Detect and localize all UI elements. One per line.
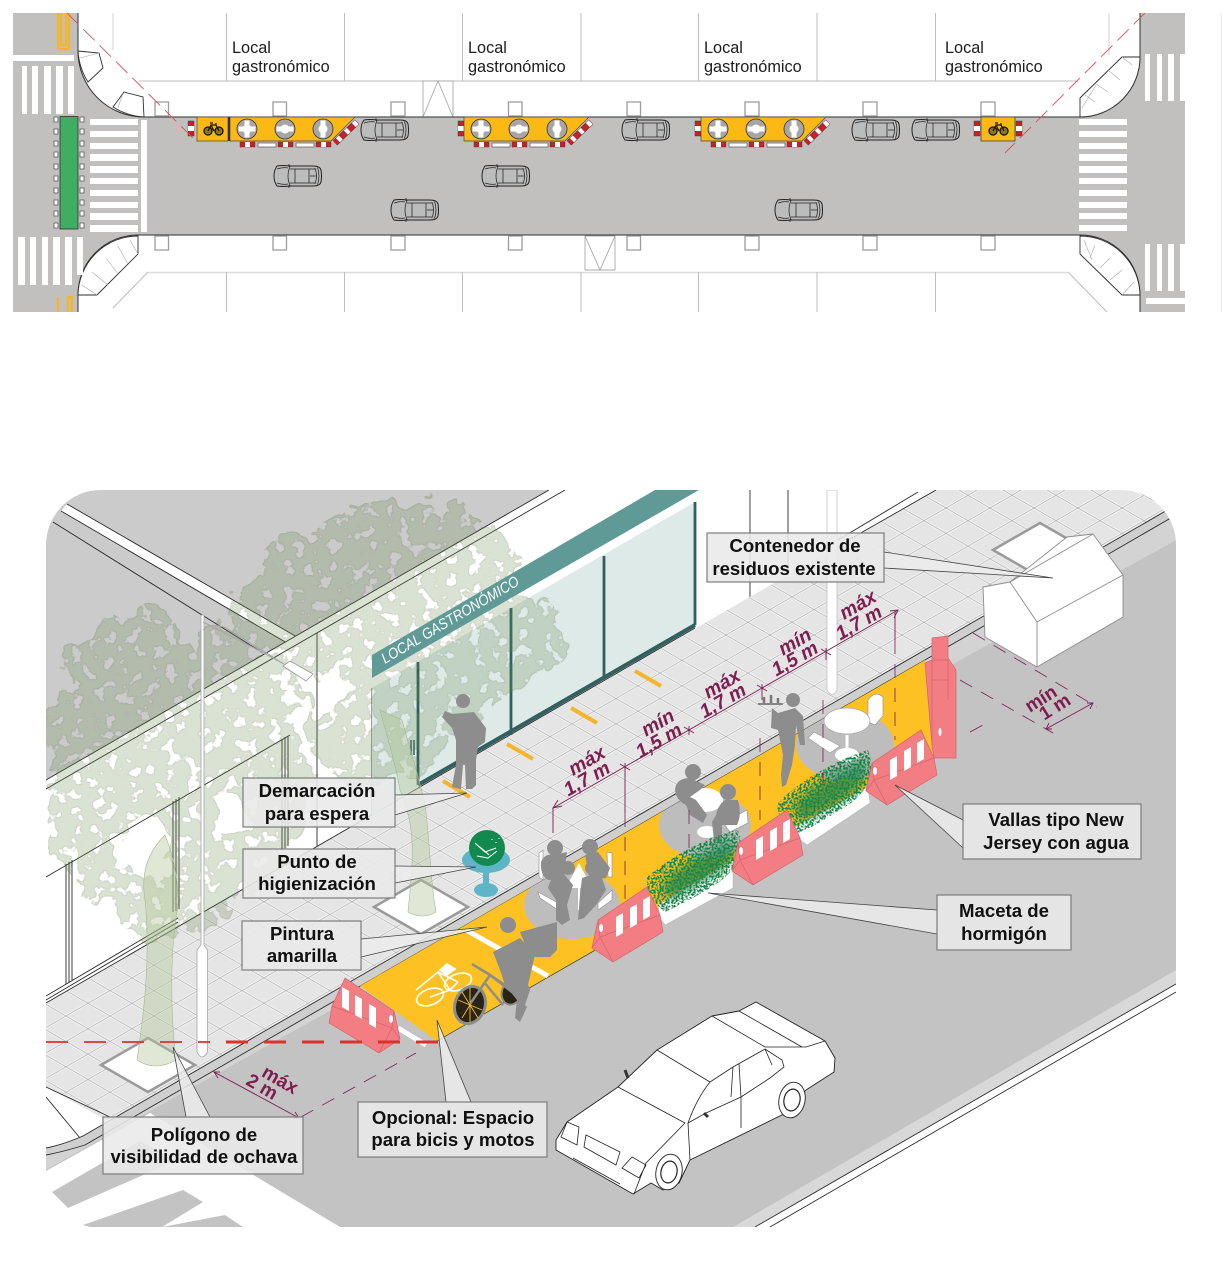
callout: poligono: visibilidad de ochava (110, 1146, 298, 1167)
parklet 3 (695, 117, 828, 147)
callout: pintura amarilla (242, 921, 487, 970)
dim: min 1 m (960, 633, 1097, 733)
dim: max 2 m (214, 1053, 416, 1118)
callout: pintura amarilla: Pintura (270, 923, 335, 944)
crosswalk zebra (46, 1113, 340, 1227)
callout: opcional: para bicis y motos (371, 1129, 535, 1150)
label: local 4: gastronómico (945, 58, 1043, 76)
sign: local gastronomico (372, 490, 699, 678)
dim: min 1,5 m: 1,5 m (768, 637, 822, 681)
callout: opcional: Opcional: Espacio (372, 1107, 534, 1128)
street lamp (197, 615, 313, 1057)
dim: max 2 m: máx (258, 1062, 302, 1099)
far curb and sidewalk (733, 970, 1176, 1227)
label: local 1: Local (232, 39, 271, 57)
dim: max 1,7 m: 1,7 m (560, 757, 614, 801)
hygiene station (462, 830, 510, 897)
sidewalk (46, 490, 1176, 1138)
label: local 4: Local (945, 39, 984, 57)
man waiting (442, 694, 486, 789)
tree pits (101, 523, 1087, 1092)
shop window glass (372, 502, 695, 815)
table group 1 (538, 839, 612, 925)
callout: higienizacion: Punto de (277, 851, 357, 872)
yellow markings on sidewalk (443, 671, 661, 797)
sedan car (556, 1002, 835, 1194)
cars plan view (274, 118, 960, 222)
visibility lines (67, 13, 1145, 153)
callout: vallas: Jersey con agua (983, 832, 1130, 853)
callout: poligono: Polígono de (151, 1124, 257, 1145)
white bike stencil (414, 964, 474, 1009)
callout: maceta: Maceta de (959, 900, 1049, 921)
dim: min 1,5 m: mín (774, 624, 816, 660)
dim: min 1 m: mín (1021, 682, 1061, 717)
parklet yellow platform (360, 660, 935, 1045)
callout: demarcacion (243, 778, 467, 827)
label: local 1: gastronómico (232, 58, 330, 76)
dim: max 1,7 m: 1,7 m (696, 679, 750, 723)
road and intersections (13, 13, 1185, 312)
yellow road markings (58, 13, 72, 312)
dim: min 1,5 m: mín (637, 705, 679, 741)
trash container (983, 534, 1123, 667)
road (46, 515, 1176, 1227)
barrier 4 (866, 730, 937, 805)
table group 3 (808, 694, 883, 762)
planter 1 with foliage (647, 830, 741, 925)
roof bands (46, 490, 565, 790)
parklet 1 with bike zone (188, 117, 357, 147)
panel: plan view of block (13, 13, 1185, 312)
dim: min 1,5 m (637, 712, 682, 758)
building facade lines (46, 490, 788, 1000)
dimension chain (553, 610, 898, 900)
driveways (423, 81, 615, 270)
dim: min 1,5 m: 1,5 m (632, 719, 686, 763)
dim: max 1,7 m: máx (836, 585, 881, 624)
crosswalks (13, 54, 1185, 304)
label: local 2: gastronómico (468, 58, 566, 76)
callout: contenedor: residuos existente (712, 558, 876, 579)
tree crowns (47, 501, 560, 936)
callout: higienizacion: higienización (258, 873, 376, 894)
label: local 3: Local (704, 39, 743, 57)
callout: poligono (103, 1047, 303, 1174)
table zones (524, 710, 894, 939)
panel: isometric view (46, 490, 1176, 1227)
barrier 1 (329, 978, 400, 1053)
dim: max 1,7 m: 1,7 m (832, 601, 886, 645)
delivery person with bicycle (449, 917, 557, 1028)
median: green bike lane with bollards (54, 116, 84, 229)
callout: pintura amarilla: amarilla (267, 945, 338, 966)
sidewalk property lines (113, 13, 1109, 312)
barrier 2 (592, 887, 663, 962)
barrier 3 (732, 810, 803, 885)
callout: contenedor (707, 533, 1053, 582)
sign: local gastronomico: LOCAL GASTRONÓMICO (378, 573, 523, 667)
red visibility line (46, 1041, 439, 1043)
tree trunks (137, 710, 436, 1066)
planter 2 with foliage (777, 750, 871, 845)
curb band (46, 505, 1176, 1155)
callout: contenedor: Contenedor de (729, 535, 861, 556)
table group 2 (675, 764, 748, 843)
dim: max 1,7 m: máx (700, 664, 745, 703)
existing lamp post (827, 490, 837, 694)
callout: maceta (708, 893, 1071, 950)
dim: max 2 m: 2 m (242, 1070, 281, 1105)
callout: demarcacion: para espera (265, 803, 370, 824)
callout: vallas (895, 785, 1141, 859)
dim: max 1,7 m: máx (565, 741, 610, 780)
tall end barrier (925, 636, 956, 758)
parklet 4 bike zone (974, 117, 1022, 141)
corner ramps (78, 51, 1140, 295)
lighter curb strip (46, 515, 1176, 1170)
callout: vallas: Vallas tipo New (988, 809, 1124, 830)
dim: min 1 m: 1 m (1036, 690, 1075, 725)
label: local 3: gastronómico (704, 58, 802, 76)
callout: opcional (358, 1020, 547, 1157)
parklet 2 (458, 117, 591, 147)
tree pits (155, 102, 995, 250)
curb lines (78, 13, 1140, 312)
label: local 2: Local (468, 39, 507, 57)
grey roof (46, 490, 549, 780)
callout: demarcacion: Demarcación (259, 780, 375, 801)
waiter with tray (758, 693, 805, 787)
callout: maceta: hormigón (961, 923, 1047, 944)
dim: max 1,7 m (565, 747, 610, 796)
callout: higienizacion (243, 849, 476, 898)
